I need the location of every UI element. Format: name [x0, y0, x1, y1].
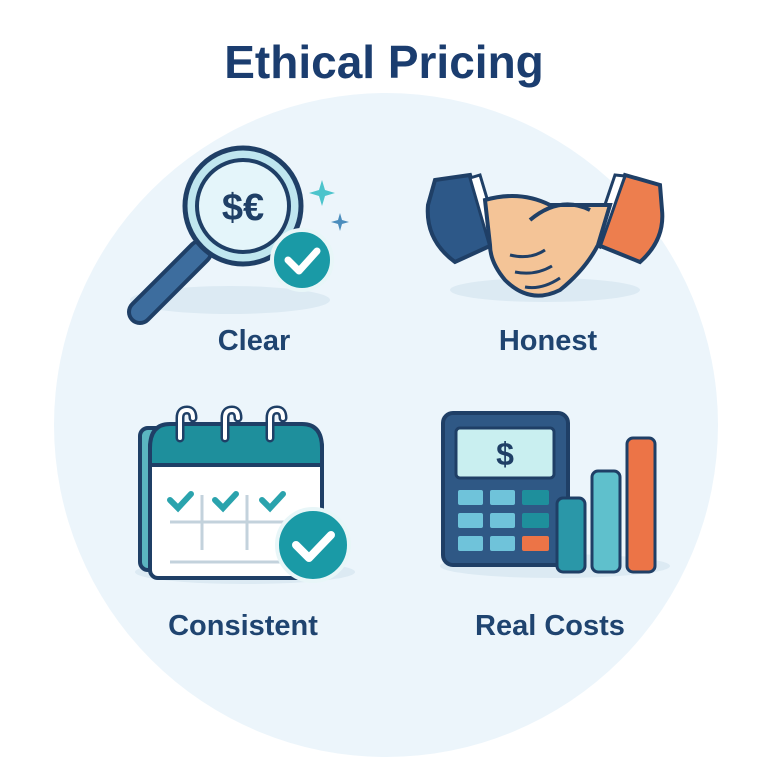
- icon: calculator and bars: [440, 413, 670, 578]
- icon: handshake: [428, 175, 662, 302]
- title: Ethical Pricing: [224, 36, 544, 88]
- icon: magnifier: [130, 148, 349, 314]
- label: Real Costs: Real Costs: [475, 610, 625, 642]
- label: Consistent: Consistent: [168, 610, 318, 642]
- icon: calculator and bars: $: [496, 436, 514, 472]
- label: Clear: Clear: [218, 325, 290, 357]
- label: Honest: Honest: [499, 325, 597, 357]
- icon: magnifier: $€: [222, 187, 264, 229]
- icon: calendar: [135, 410, 355, 584]
